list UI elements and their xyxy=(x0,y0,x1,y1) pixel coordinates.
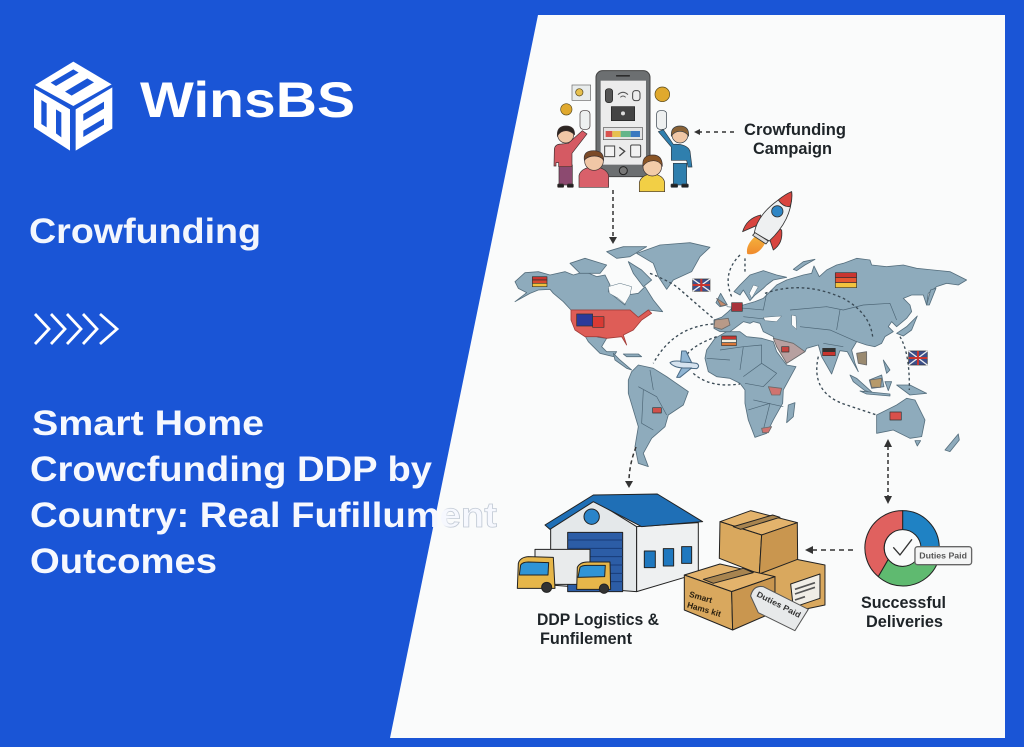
map land xyxy=(515,243,967,467)
label: crowfunding campaign xyxy=(744,121,846,158)
flag: Russia xyxy=(835,273,857,288)
arrow: campaign to map xyxy=(609,190,617,244)
icon: truck left xyxy=(517,549,590,592)
arrow: map to warehouse xyxy=(625,447,636,488)
arrow: delivery to boxes xyxy=(805,546,856,554)
illustration: crowdfunding campaign xyxy=(554,71,692,192)
label: DDP logistics: Funfilement xyxy=(540,630,632,648)
icon: truck right xyxy=(577,562,611,593)
arrow: map and deliveries xyxy=(884,439,892,504)
icon: donut chart: Duties Paid xyxy=(919,551,967,560)
icon: cube logo xyxy=(34,62,112,151)
label: successful deliveries: Deliveries xyxy=(866,613,943,631)
icon: box labels: Smart xyxy=(688,589,714,605)
label: successful deliveries: Successful xyxy=(861,594,946,612)
label: DDP logistics xyxy=(537,611,659,648)
map: shipping routes xyxy=(650,255,909,415)
illustration: warehouse, boxes and delivery xyxy=(517,494,972,631)
icon: duties tag xyxy=(751,586,808,631)
world map xyxy=(515,243,967,467)
icon: box labels: Hams kit xyxy=(686,600,722,619)
person: right xyxy=(657,111,692,187)
dashed connector: campaign label xyxy=(694,129,736,135)
title text block: Crowcfunding DDP by xyxy=(30,450,433,489)
icon: phone xyxy=(596,71,650,177)
flag: Australia xyxy=(890,412,901,420)
icon: chevrons xyxy=(35,314,117,344)
icon: airplane xyxy=(670,351,699,377)
title text block xyxy=(30,404,497,581)
map: highlighted countries xyxy=(714,298,882,433)
flag: UK north Atlantic xyxy=(693,279,710,291)
icon: boxes xyxy=(684,511,825,630)
flag: Saudi xyxy=(782,347,789,352)
label: crowfunding campaign: Campaign xyxy=(753,140,832,158)
title text block: Outcomes xyxy=(30,542,217,581)
icon: duties tag: Duties Paid xyxy=(755,590,802,620)
flags xyxy=(532,273,927,420)
map: USA highlight xyxy=(571,310,652,345)
icon: donut chart xyxy=(865,511,972,586)
label: crowfunding campaign: Crowfunding xyxy=(744,121,846,139)
map: country borders xyxy=(638,293,897,430)
flag: Morocco xyxy=(722,336,736,346)
person: left xyxy=(554,111,590,187)
icon: coins xyxy=(561,85,670,115)
icon: box labels xyxy=(686,589,722,619)
flag: USA xyxy=(577,314,604,327)
wordmark: WinsBS xyxy=(140,72,355,128)
title text block: Country: Real Fufillument xyxy=(30,496,497,535)
label: successful deliveries xyxy=(861,594,946,631)
white slanted panel xyxy=(390,15,1005,738)
flag: Germany xyxy=(732,303,742,311)
flag: Alaska xyxy=(532,277,547,287)
icon: rocket xyxy=(743,192,792,254)
logo: WinsBS xyxy=(34,62,355,151)
person: center left xyxy=(579,151,609,187)
flag: Brazil xyxy=(653,408,661,413)
label: DDP logistics: DDP Logistics & xyxy=(537,611,659,629)
map: white seas xyxy=(608,283,797,329)
icon: warehouse xyxy=(545,494,703,592)
person: center right xyxy=(639,155,665,192)
heading: Crowfunding: Crowfunding xyxy=(29,212,261,251)
flag: UK east xyxy=(909,351,927,365)
flag: India xyxy=(823,348,835,356)
title text block: Smart Home xyxy=(32,404,264,443)
